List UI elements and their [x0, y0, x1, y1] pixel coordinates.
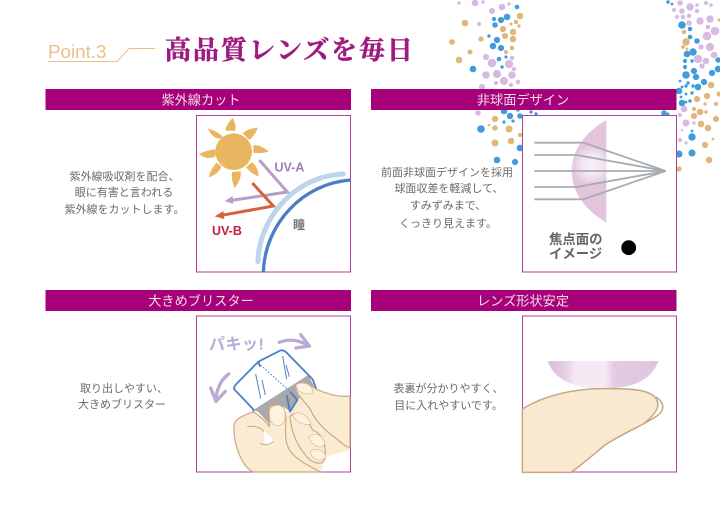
text block: aspheric description: くっきり見えます。 [399, 217, 497, 230]
text block: aspheric description [381, 165, 513, 230]
arrow: left curved [211, 374, 229, 401]
panel: lens shape stability [371, 290, 676, 472]
diagram: UV protection [196, 116, 351, 272]
text block: lens shape description: 表裏が分かりやすく、 [394, 381, 504, 395]
arrow: UV-B reflection [215, 183, 273, 219]
fingertip [522, 389, 663, 472]
label: pupil: 瞳 [293, 217, 305, 232]
blister pack [234, 350, 317, 424]
light blue lens arc [258, 174, 343, 262]
icon: focal dot [621, 240, 636, 255]
label: UV-B: UV-B [212, 224, 242, 238]
text block: UV cut description: 眼に有害と言われる [75, 185, 173, 199]
diagram: lens on fingertip [522, 316, 676, 472]
light rays [534, 143, 666, 199]
heading: lens shape stability: レンズ形状安定 [477, 294, 569, 308]
text block: aspheric description: 前面非球面デザインを採用 [381, 165, 513, 179]
arrow: UV-A reflection [225, 160, 287, 204]
text block: UV cut description [65, 170, 184, 216]
heading: Point.3 label [48, 41, 155, 62]
contact lens [548, 361, 658, 389]
text block: aspheric description: 球面収差を軽減して、 [394, 181, 504, 195]
panel: UV cut [46, 89, 351, 272]
panel: large blister [46, 290, 351, 472]
heading: UV cut [46, 89, 351, 110]
text block: UV cut description: 紫外線をカットします。 [65, 203, 184, 216]
label: snap sound: パキッ! [209, 336, 264, 354]
heading: aspheric design: 非球面デザイン [477, 92, 569, 108]
finger outlines [234, 383, 350, 472]
heading: large blister: 大きめブリスター [148, 292, 254, 308]
label: focal image: 焦点面の [549, 231, 603, 247]
heading: UV cut: 紫外線カット [161, 92, 241, 108]
text block: blister description [78, 382, 168, 411]
panel: aspheric design [371, 89, 676, 272]
text block: lens shape description [394, 381, 504, 412]
hand [234, 382, 350, 471]
heading: Point.3 label: Point.3 [48, 41, 106, 62]
text block: blister description: 大きめブリスター [78, 397, 166, 411]
diagram: focal point [522, 116, 676, 272]
heading: lens shape stability [371, 290, 676, 311]
text block: UV cut description: 紫外線吸収剤を配合、 [70, 170, 180, 183]
lens cross-section [572, 120, 606, 223]
label: UV-A: UV-A [274, 160, 304, 174]
text block: lens shape description: 目に入れやすいです。 [394, 399, 503, 412]
diagram: snapping blister [196, 316, 350, 472]
heading: large blister [46, 290, 351, 311]
text block: blister description: 取り出しやすい、 [80, 382, 168, 395]
fingernails [269, 383, 326, 460]
icon: sun [199, 118, 269, 188]
decorative dot clusters [449, 0, 720, 171]
heading: aspheric design [371, 89, 676, 110]
text block: aspheric description: すみずみまで、 [410, 199, 486, 212]
arrow: top curved [279, 335, 309, 348]
title: 高品質レンズを毎日 [165, 30, 415, 67]
label: focal image [549, 231, 603, 262]
blue eye arc [263, 180, 351, 272]
label: focal image: イメージ [549, 246, 602, 262]
